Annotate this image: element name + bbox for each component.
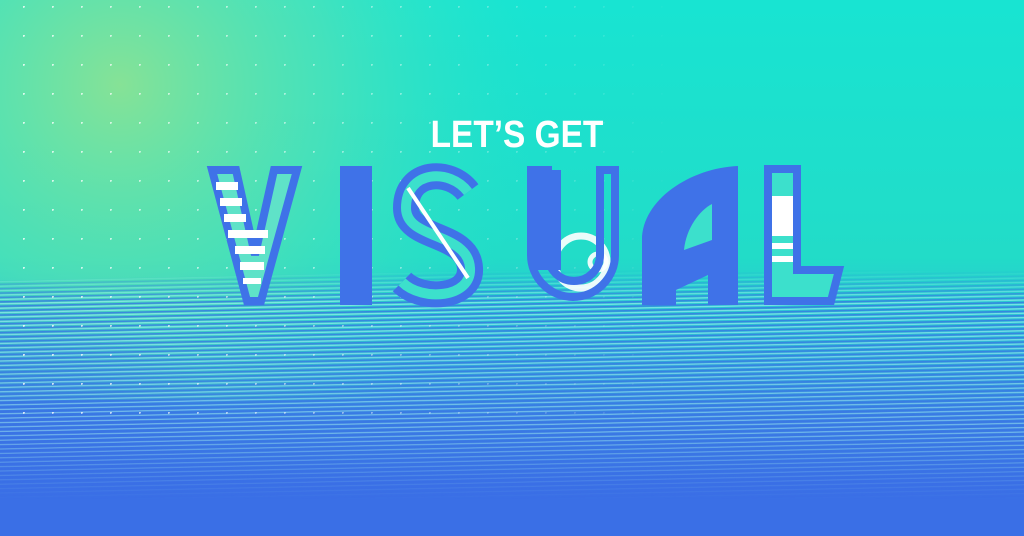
letter L bbox=[768, 169, 839, 301]
subtitle: LET'S GET: LET’S GET bbox=[431, 113, 603, 155]
title: VISUAL bbox=[212, 166, 839, 305]
letter I bbox=[340, 166, 372, 305]
letter A bbox=[642, 166, 738, 305]
letter U bbox=[531, 170, 615, 297]
letter V bbox=[212, 170, 297, 301]
letter S bbox=[402, 176, 470, 294]
